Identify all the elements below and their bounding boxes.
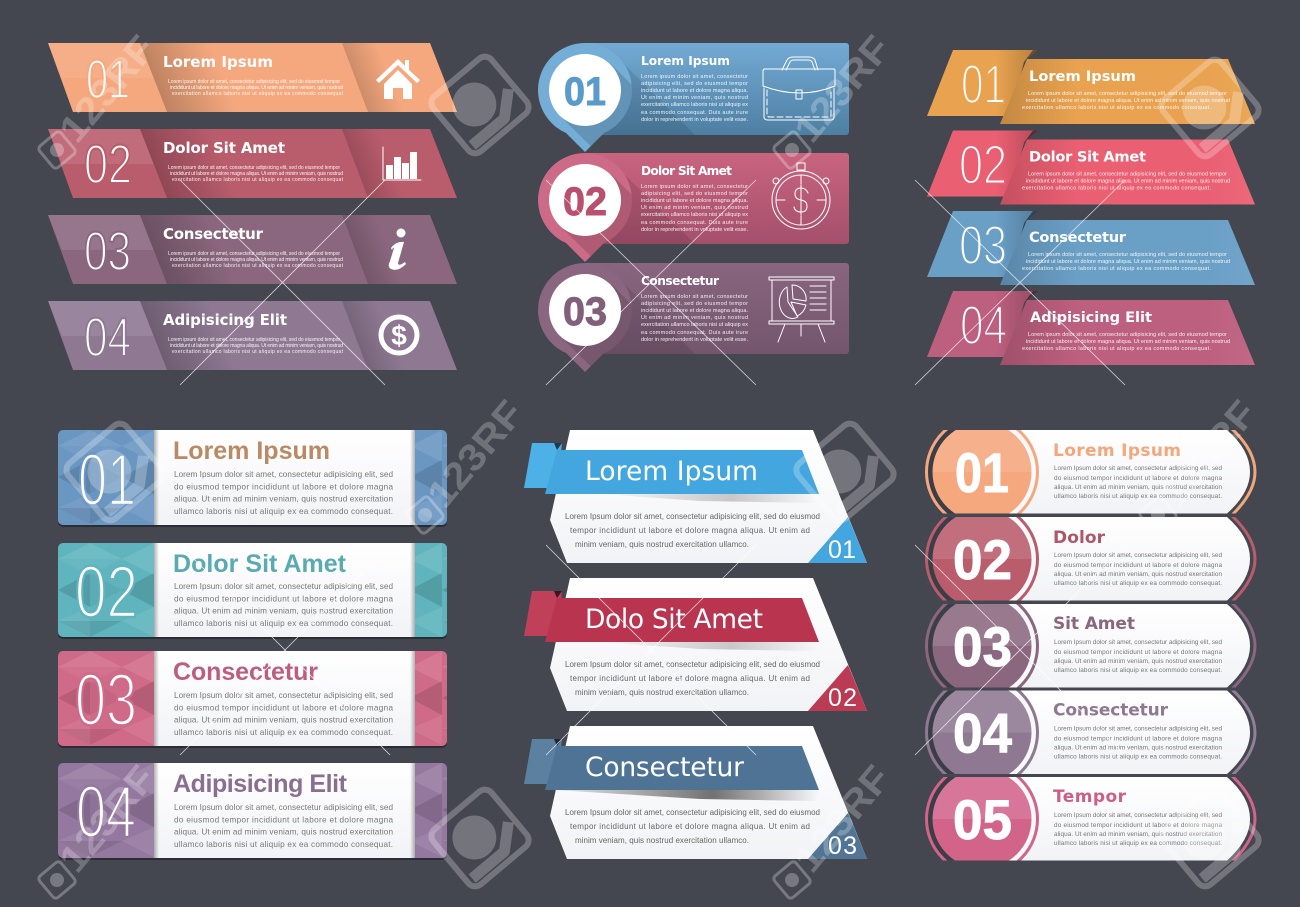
card 04: ullamco laboris nisi ut aliquip ex ea commodo consequat. bbox=[174, 840, 393, 849]
card 02 bbox=[538, 153, 849, 262]
watermark 123RF stamp middle left: 123RF bbox=[420, 393, 532, 516]
ribbon 01 bbox=[927, 50, 1255, 124]
card 03: do eiusmod tempor incididunt ut labore et dolore magna bbox=[174, 704, 393, 712]
card 03: Consectetur bbox=[641, 274, 719, 288]
ribbon 03: Lorem ipsum dolor sit amet, consectetur adipisicing elit, sed do eiusmod tempor bbox=[1028, 252, 1227, 258]
banner 03: exercitation ullamco laboris nisi ut aliquip ex ea commodo consequat bbox=[172, 263, 344, 269]
ribbon 01: 01 bbox=[961, 53, 1006, 115]
card 01: incididunt ut labore et dolore magna aliqua. bbox=[641, 88, 748, 94]
pill 02: 02 bbox=[953, 528, 1012, 591]
card 04: Lorem Ipsum dolor sit amet, consectetur adipisicing elit, sed bbox=[174, 803, 393, 812]
card 03: ullamco laboris nisi ut aliquip ex ea commodo consequat. bbox=[174, 728, 393, 737]
ribbon card 01: Lorem Ipsum bbox=[585, 456, 758, 487]
card 03: 03 bbox=[563, 290, 607, 334]
card 03: aliqua. Ut enim ad minim veniam, quis nostrud exercitation bbox=[174, 716, 393, 724]
panel: circle number pills bbox=[926, 416, 1255, 874]
card 01: Lorem Ipsum bbox=[173, 437, 330, 465]
card 03: ea commodo consequat. Duis aute irure bbox=[641, 330, 748, 336]
card 02: ea commodo consequat. Duis aute irure bbox=[641, 220, 748, 226]
banner 02: Dolor Sit Amet bbox=[163, 139, 285, 157]
banner 01: Lorem Ipsum bbox=[163, 53, 273, 71]
pill 03: ullamco laboris nisi ut aliquip ex ea commodo consequat. bbox=[1054, 667, 1222, 674]
watermark 123RF stamp middle right bbox=[1138, 393, 1265, 535]
pill 04: ullamco laboris nisi ut aliquip ex ea commodo consequat. bbox=[1054, 754, 1222, 760]
card 02: exercitation ullamco laboris nisi ut aliquip ex bbox=[641, 212, 748, 218]
panel: map pin cards bbox=[530, 40, 849, 395]
ribbon card 01 bbox=[524, 430, 867, 564]
watermark 123RF stamp top left bbox=[37, 28, 164, 170]
ribbon 02: incididunt ut labore et dolore magna aliqua. Ut enim ad minim veniam, quis nostrud bbox=[1026, 178, 1230, 184]
ribbon card 03: 03 bbox=[828, 832, 857, 860]
ribbon card 02: Lorem Ipsum dolor sit amet, consectetur adipisicing elit, sed do eiusmod bbox=[565, 660, 820, 669]
panel: slanted banners bbox=[48, 43, 457, 370]
watermark 123RF stamp middle right: 123RF bbox=[1153, 393, 1265, 516]
ribbon 04 bbox=[927, 291, 1255, 365]
ribbon 04: Adipisicing Elit bbox=[1030, 309, 1152, 326]
pill 05 bbox=[925, 777, 1256, 860]
ribbon card 01: tempor incididunt ut labore et dolore magna aliqua. Ut enim ad bbox=[570, 526, 810, 535]
ribbon card 02: tempor incididunt ut labore et dolore magna aliqua. Ut enim ad bbox=[570, 674, 810, 683]
ribbon 01: Lorem Ipsum bbox=[1029, 68, 1136, 85]
banner 03: incididunt ut labore et dolore magna aliqua. Ut enim ad minim veniam, quis nostrud bbox=[170, 257, 343, 263]
ribbon 02: 02 bbox=[959, 134, 1007, 196]
watermark 123RF stamp bottom centre: 123RF bbox=[787, 758, 899, 881]
card 04 bbox=[58, 763, 447, 860]
watermark 123RF stamp bottom left: 123RF bbox=[52, 758, 164, 881]
ribbon 03: 03 bbox=[959, 214, 1007, 276]
panel: white ribbon cards bbox=[524, 430, 867, 860]
pill 01: ullamco laboris nisi ut aliquip ex ea commodo consequat. bbox=[1054, 493, 1222, 500]
card 01: ea commodo consequat. Duis aute irure bbox=[641, 110, 748, 116]
card 01: 01 bbox=[78, 440, 136, 521]
ribbon 04: exercitation ullamco laboris nisi ut aliquip ex ea commodo consequat. bbox=[1022, 346, 1211, 352]
watermark 123RF stamp bottom left bbox=[37, 758, 164, 900]
watermark 123RF stamp top centre bbox=[772, 28, 899, 170]
card 02: Lorem Ipsum dolor sit amet, consectetur adipisicing elit, sed bbox=[174, 582, 393, 591]
card 03: dolor in reprehenderit in voluptate velit esse. bbox=[641, 337, 748, 343]
pill 05: do eiusmod tempor incididunt ut labore et dolore magna bbox=[1054, 822, 1222, 829]
pill 02: aliqua. Ut enim ad minim veniam, quis nostrud exercitation bbox=[1054, 571, 1222, 578]
pill 02: do eiusmod tempor incididunt ut labore et dolore magna bbox=[1054, 562, 1222, 569]
pill 04: do eiusmod tempor incididunt ut labore et dolore magna bbox=[1054, 736, 1222, 742]
ribbon 04: 04 bbox=[960, 294, 1007, 356]
ribbon 03: exercitation ullamco laboris nisi ut aliquip ex ea commodo consequat. bbox=[1022, 266, 1211, 272]
card 03: Lorem Ipsum dolor sit amet, consectetur adipisicing elit, sed bbox=[174, 691, 393, 700]
card 03: Lorem ipsum dolor sit amet, consectetur bbox=[641, 294, 748, 300]
banner 04: Adipisicing Elit bbox=[163, 311, 287, 329]
pill 03: 03 bbox=[953, 615, 1012, 678]
card 04: aliqua. Ut enim ad minim veniam, quis nostrud exercitation bbox=[174, 828, 393, 836]
pill 02 bbox=[925, 517, 1256, 600]
ribbon 03: incididunt ut labore et dolore magna aliqua. Ut enim ad minim veniam, quis nostrud bbox=[1026, 259, 1230, 265]
ribbon 03 bbox=[927, 211, 1255, 285]
card 01: do eiusmod tempor incididunt ut labore et dolore magna bbox=[174, 482, 393, 492]
pill 04: Consectetur bbox=[1053, 700, 1169, 720]
icon: info bbox=[389, 228, 406, 270]
card 01: ullamco laboris nisi ut aliquip ex ea commodo consequat. bbox=[174, 507, 393, 516]
card 03: Ut enim ad minim veniam, quis nostrud bbox=[641, 315, 748, 321]
ribbon card 01: 01 bbox=[828, 536, 856, 564]
card 01: exercitation ullamco laboris nisi ut aliquip ex bbox=[641, 102, 748, 108]
ribbon card 03: minim veniam, quis nostrud exercitation ullamco. bbox=[575, 836, 749, 845]
watermark 123RF stamp top left: 123RF bbox=[52, 28, 164, 151]
pill 03: Sit Amet bbox=[1053, 614, 1135, 634]
panel: folded ribbon banners bbox=[927, 50, 1255, 365]
watermark 123RF stamp bottom centre bbox=[772, 758, 899, 900]
pill 04: aliqua. Ut enim ad minim veniam, quis nostrud exercitation bbox=[1054, 744, 1222, 752]
ribbon 02: Dolor Sit Amet bbox=[1029, 148, 1146, 166]
pill 05: ullamco laboris nisi ut aliquip ex ea commodo consequat. bbox=[1054, 840, 1222, 847]
ribbon card 03: Consectetur bbox=[585, 752, 744, 783]
banner 01: incididunt ut labore et dolore magna aliqua. Ut enim ad minim veniam, quis nostrud bbox=[170, 85, 343, 91]
ribbon 04: Lorem ipsum dolor sit amet, consectetur adipisicing elit, sed do eiusmod tempor bbox=[1028, 332, 1227, 338]
banner 02: 02 bbox=[84, 133, 132, 195]
card 01: Lorem ipsum dolor sit amet, consectetur bbox=[641, 74, 748, 80]
card 01: 01 bbox=[564, 70, 606, 114]
ribbon 01: exercitation ullamco laboris nisi ut aliquip ex ea commodo consequat. bbox=[1022, 105, 1211, 111]
banner 03: Consectetur bbox=[163, 225, 264, 243]
ribbon card 02: minim veniam, quis nostrud exercitation ullamco. bbox=[575, 688, 749, 697]
ribbon card 02 bbox=[524, 578, 867, 712]
pill 05: Tempor bbox=[1053, 787, 1127, 807]
banner 01: Lorem ipsum dolor sit amet, consectetur adipisicing elit, sed do eiusmod tempor bbox=[168, 79, 340, 85]
card 01: Lorem Ipsum bbox=[641, 54, 730, 68]
card 01: Ut enim ad minim veniam, quis nostrud bbox=[641, 95, 748, 101]
ribbon 02 bbox=[927, 130, 1255, 204]
card 03 bbox=[58, 651, 447, 748]
card 02: Dolor Sit Amet bbox=[641, 164, 732, 178]
pill 03: Lorem Ipsum dolor sit amet, consectetur adipisicing elit, sed bbox=[1054, 639, 1222, 646]
card 01: aliqua. Ut enim ad minim veniam, quis nostrud exercitation bbox=[174, 494, 393, 504]
banner 04 bbox=[48, 301, 457, 370]
banner 03: 03 bbox=[84, 220, 131, 282]
pill 04 bbox=[925, 690, 1256, 774]
ribbon 02: exercitation ullamco laboris nisi ut aliquip ex ea commodo consequat. bbox=[1022, 186, 1211, 192]
card 02: 02 bbox=[563, 180, 607, 224]
card 02: adipisicing elit, sed do eiusmod tempor bbox=[641, 191, 748, 197]
pill 04: Lorem Ipsum dolor sit amet, consectetur adipisicing elit, sed bbox=[1054, 726, 1222, 732]
pill 01: do eiusmod tempor incididunt ut labore et dolore magna bbox=[1054, 475, 1222, 482]
icon: bar chart bbox=[383, 147, 421, 180]
banner 01: 01 bbox=[86, 48, 130, 110]
pill 03 bbox=[925, 604, 1256, 688]
pill 01: Lorem Ipsum dolor sit amet, consectetur adipisicing elit, sed bbox=[1054, 465, 1222, 472]
card 01 bbox=[58, 430, 447, 527]
card 03: incididunt ut labore et dolore magna aliqua. bbox=[641, 308, 748, 314]
card 03: exercitation ullamco laboris nisi ut aliquip ex bbox=[641, 322, 748, 328]
icon: briefcase bbox=[763, 57, 835, 120]
card 02: do eiusmod tempor incididunt ut labore et dolore magna bbox=[174, 594, 393, 604]
banner 02: exercitation ullamco laboris nisi ut aliquip ex ea commodo consequat bbox=[172, 177, 344, 183]
card 02: Dolor Sit Amet bbox=[173, 550, 347, 578]
ribbon 03: Consectetur bbox=[1029, 229, 1127, 246]
card 02: Lorem ipsum dolor sit amet, consectetur bbox=[641, 184, 748, 190]
card 02: 02 bbox=[75, 552, 138, 633]
ribbon 04: incididunt ut labore et dolore magna aliqua. Ut enim ad minim veniam, quis nostrud bbox=[1026, 339, 1230, 345]
icon: dollar coin bbox=[381, 317, 417, 353]
banner 03: Lorem ipsum dolor sit amet, consectetur adipisicing elit, sed do eiusmod tempor bbox=[168, 251, 340, 257]
ribbon card 03: Lorem Ipsum dolor sit amet, consectetur adipisicing elit, sed do eiusmod bbox=[565, 808, 820, 817]
card 03: 03 bbox=[75, 660, 137, 741]
ribbon card 01: Lorem Ipsum dolor sit amet, consectetur adipisicing elit, sed do eiusmod bbox=[565, 512, 820, 521]
pill 02: Dolor bbox=[1053, 528, 1106, 548]
pill 05: aliqua. Ut enim ad minim veniam, quis nostrud exercitation bbox=[1054, 831, 1222, 838]
ribbon card 03: tempor incididunt ut labore et dolore magna aliqua. Ut enim ad bbox=[570, 822, 810, 831]
icon: presentation board bbox=[769, 277, 834, 342]
card 04: do eiusmod tempor incididunt ut labore et dolore magna bbox=[174, 816, 393, 824]
icon: stopwatch bbox=[772, 163, 830, 229]
pill 02: ullamco laboris nisi ut aliquip ex ea commodo consequat. bbox=[1054, 580, 1222, 587]
pill 04: 04 bbox=[953, 702, 1012, 764]
icon: house bbox=[376, 59, 420, 99]
card 01: dolor in reprehenderit in voluptate velit esse. bbox=[641, 117, 748, 123]
card 01: Lorem Ipsum dolor sit amet, consectetur adipisicing elit, sed bbox=[174, 470, 393, 479]
pill 01: aliqua. Ut enim ad minim veniam, quis nostrud exercitation bbox=[1054, 484, 1222, 491]
banner 04: Lorem ipsum dolor sit amet, consectetur adipisicing elit, sed do eiusmod tempor bbox=[168, 337, 340, 343]
ribbon card 02: Dolo Sit Amet bbox=[585, 604, 763, 635]
card 02: Ut enim ad minim veniam, quis nostrud bbox=[641, 205, 748, 211]
card 03: adipisicing elit, sed do eiusmod tempor bbox=[641, 301, 748, 307]
banner 04: incididunt ut labore et dolore magna aliqua. Ut enim ad minim veniam, quis nostrud bbox=[170, 343, 343, 349]
card 02 bbox=[58, 543, 447, 639]
ribbon 01: Lorem ipsum dolor sit amet, consectetur adipisicing elit, sed do eiusmod tempor bbox=[1028, 91, 1227, 97]
card 04: 04 bbox=[76, 772, 136, 853]
ribbon 01: incididunt ut labore et dolore magna aliqua. Ut enim ad minim veniam, quis nostrud bbox=[1026, 98, 1230, 104]
card 03: Consectetur bbox=[173, 658, 318, 686]
pill 03: aliqua. Ut enim ad minim veniam, quis nostrud exercitation bbox=[1054, 658, 1222, 665]
panel: polygon pattern cards bbox=[58, 430, 447, 860]
icon: dollar coin: $ bbox=[391, 320, 407, 351]
pill 03: do eiusmod tempor incididunt ut labore et dolore magna bbox=[1054, 649, 1222, 656]
ribbon 02: Lorem ipsum dolor sit amet, consectetur adipisicing elit, sed do eiusmod tempor bbox=[1028, 172, 1227, 178]
banner 03 bbox=[48, 215, 457, 284]
pill 01: 01 bbox=[955, 441, 1009, 504]
card 01 bbox=[538, 43, 849, 152]
card 02: ullamco laboris nisi ut aliquip ex ea commodo consequat. bbox=[174, 619, 393, 628]
card 02: aliqua. Ut enim ad minim veniam, quis nostrud exercitation bbox=[174, 606, 393, 616]
banner 02: Lorem ipsum dolor sit amet, consectetur adipisicing elit, sed do eiusmod tempor bbox=[168, 165, 340, 171]
banner 04: 04 bbox=[84, 306, 131, 368]
pill 05: Lorem Ipsum dolor sit amet, consectetur adipisicing elit, sed bbox=[1054, 812, 1222, 819]
card 03 bbox=[538, 263, 849, 372]
card 01: adipisicing elit, sed do eiusmod tempor bbox=[641, 81, 748, 87]
watermark 123RF stamp middle left bbox=[405, 393, 532, 535]
banner 04: exercitation ullamco laboris nisi ut aliquip ex ea commodo consequat bbox=[172, 349, 344, 355]
pill 01 bbox=[925, 430, 1256, 514]
ribbon card 02: 02 bbox=[828, 684, 857, 712]
banner 01: exercitation ullamco laboris nisi ut aliquip ex ea commodo consequat bbox=[172, 91, 344, 97]
card 02: incididunt ut labore et dolore magna aliqua. bbox=[641, 198, 748, 204]
card 04: Adipisicing Elit bbox=[173, 770, 348, 798]
banner 02: incididunt ut labore et dolore magna aliqua. Ut enim ad minim veniam, quis nostrud bbox=[170, 171, 343, 177]
pill 05: 05 bbox=[953, 788, 1012, 851]
watermark 123RF stamp top centre: 123RF bbox=[787, 28, 899, 151]
banner 02 bbox=[48, 129, 457, 198]
pill 01: Lorem Ipsum bbox=[1053, 441, 1181, 461]
banner 01 bbox=[48, 43, 457, 112]
ribbon card 03 bbox=[524, 726, 867, 860]
watermark cross lines bbox=[180, 180, 1125, 755]
ribbon card 01: minim veniam, quis nostrud exercitation ullamco. bbox=[575, 540, 749, 549]
pill 02: Lorem Ipsum dolor sit amet, consectetur adipisicing elit, sed bbox=[1054, 552, 1222, 559]
card 02: dolor in reprehenderit in voluptate velit esse. bbox=[641, 227, 748, 233]
